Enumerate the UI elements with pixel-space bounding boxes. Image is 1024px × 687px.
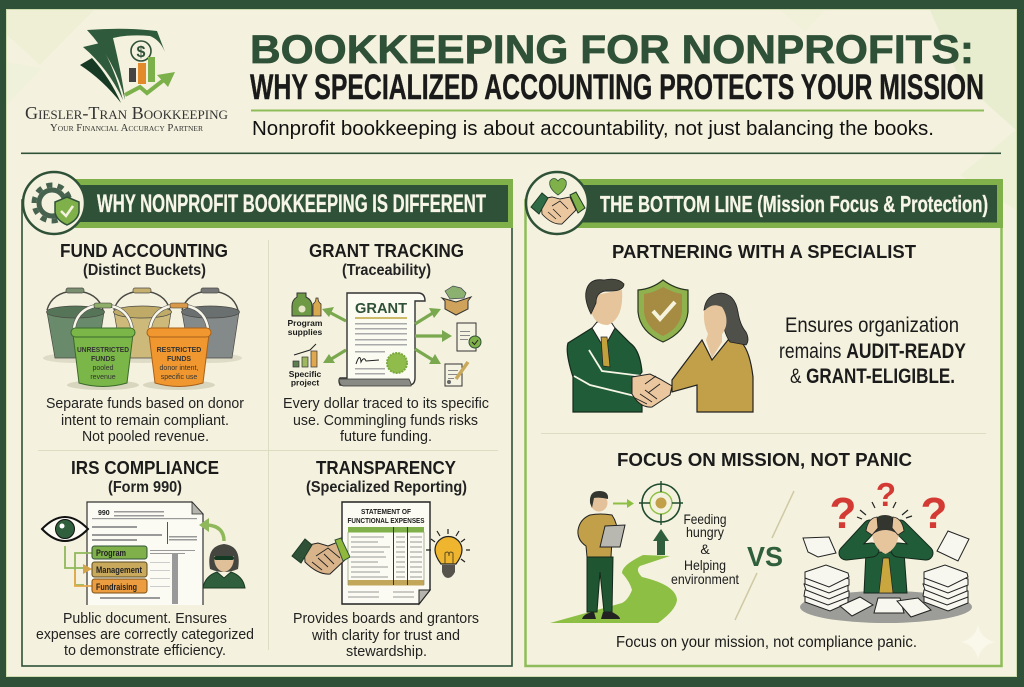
body text: Separate funds based on donor xyxy=(46,395,244,412)
arrow: person to target xyxy=(613,499,634,508)
tagline: Your Financial Accuracy Partner xyxy=(50,123,203,134)
connectors from eye to categories xyxy=(65,546,92,586)
mission label xyxy=(671,511,739,587)
icon: restricted funds bucket: donor intent, xyxy=(160,365,199,372)
icon: target xyxy=(639,481,683,525)
icon: grant document: GRANT xyxy=(355,300,407,317)
category labels: Program xyxy=(96,548,126,558)
category labels: Management xyxy=(96,565,142,575)
body text xyxy=(36,610,254,659)
panel: why nonprofit bookkeeping is different xyxy=(22,172,513,666)
body text xyxy=(46,395,244,445)
illustration: person with tablet xyxy=(578,491,625,619)
header text: WHY NONPROFIT BOOKKEEPING IS DIFFERENT xyxy=(97,190,486,218)
icon: unrestricted funds bucket xyxy=(67,303,139,390)
section: grant tracking xyxy=(283,241,489,445)
icon: ledger wings, coin and growth chart: $ xyxy=(137,44,146,61)
illustration: panicked person at desk xyxy=(800,515,972,623)
subheading: (Distinct Buckets) xyxy=(83,262,206,279)
icon: program supplies xyxy=(288,293,323,337)
icon: specific project: project xyxy=(291,378,319,388)
body text: Not pooled revenue. xyxy=(82,428,209,445)
body text: Provides boards and grantors xyxy=(293,610,479,627)
panel header band xyxy=(575,179,1003,228)
icon: question marks: ? xyxy=(921,489,947,538)
arrow: path to target xyxy=(653,529,669,555)
mission label: environment xyxy=(671,571,739,587)
body text: Every dollar traced to its specific xyxy=(283,395,489,412)
body text: use. Commingling funds risks xyxy=(293,412,478,429)
panel: the bottom line xyxy=(526,172,1003,666)
logo: Giesler-Tran Bookkeeping xyxy=(25,29,228,134)
callout: audit-ready and grant-eligible: remains AUDIT-READY xyxy=(779,340,966,363)
icon: restricted funds bucket: FUNDS xyxy=(167,356,191,363)
icon: form 990 document xyxy=(87,502,203,605)
icon: question marks: ? xyxy=(876,476,896,513)
icon: statement of functional expenses xyxy=(342,502,430,604)
icon: specific project xyxy=(289,344,322,388)
icon: ledger wings, coin and growth chart xyxy=(80,29,175,103)
icon: unrestricted funds bucket: FUNDS xyxy=(91,356,115,363)
mission label: & xyxy=(700,541,710,557)
illustration: man in green suit xyxy=(567,279,642,412)
icon: handshake xyxy=(292,538,350,574)
icon: form 990 document: 990 xyxy=(98,510,110,517)
icon: restricted funds bucket xyxy=(143,303,215,390)
icon: unrestricted funds bucket: revenue xyxy=(90,374,116,381)
callout: audit-ready and grant-eligible: Ensures organization xyxy=(785,314,959,337)
category labels xyxy=(92,546,147,593)
icon: question marks: ? xyxy=(830,489,856,538)
heading: GRANT TRACKING xyxy=(309,241,464,261)
VS label: VS xyxy=(747,541,783,572)
illustration: winding green path xyxy=(550,555,677,623)
illustration: woman in gold top xyxy=(672,293,753,412)
section: partnering with a specialist xyxy=(567,242,966,412)
icon: eye xyxy=(42,517,88,541)
icon: unrestricted funds bucket: UNRESTRICTED xyxy=(77,347,129,354)
icon: specific project: Specific xyxy=(289,369,322,379)
icon: program supplies: Program xyxy=(288,318,323,328)
icon: document with pen xyxy=(445,362,468,386)
icon: handshake with heart xyxy=(526,172,588,234)
body text xyxy=(283,395,489,445)
mission label: hungry xyxy=(686,524,724,540)
section: focus on mission, not panic xyxy=(550,450,972,651)
icon: restricted funds bucket: RESTRICTED xyxy=(157,347,201,354)
callout: audit-ready and grant-eligible: & GRANT-ELIGIBLE. xyxy=(790,365,955,388)
body text: intent to remain compliant. xyxy=(61,412,229,429)
body text: future funding. xyxy=(340,428,432,445)
subheading: (Specialized Reporting) xyxy=(306,479,467,496)
company name: Giesler-Tran Bookkeeping xyxy=(25,103,228,123)
heading: TRANSPARENCY xyxy=(316,458,456,478)
callout: audit-ready and grant-eligible xyxy=(779,314,966,388)
heading: IRS COMPLIANCE xyxy=(71,458,219,478)
icon: paper stacks and loose papers xyxy=(803,531,969,617)
body text xyxy=(293,610,479,660)
divider: versus slash xyxy=(735,491,794,620)
mission label: Feeding xyxy=(684,511,726,527)
body text: stewardship. xyxy=(346,643,427,660)
section: transparency xyxy=(292,458,479,660)
subheading: (Traceability) xyxy=(342,262,431,279)
title line 1: BOOKKEEPING FOR NONPROFITS: xyxy=(250,28,974,72)
category labels: Fundraising xyxy=(96,582,137,592)
mission label: Helping xyxy=(684,557,726,573)
icon: program supplies: supplies xyxy=(288,327,323,337)
icon: protection shield xyxy=(638,280,688,342)
panel header band xyxy=(75,179,513,228)
heading: PARTNERING WITH A SPECIALIST xyxy=(612,242,916,262)
body text: Public document. Ensures xyxy=(63,610,227,627)
icon: restricted funds bucket: specific use xyxy=(161,374,197,381)
section: IRS compliance xyxy=(36,458,254,659)
icon: question marks xyxy=(830,476,947,538)
icon: unrestricted funds bucket: pooled xyxy=(92,365,114,372)
subtitle: Nonprofit bookkeeping is about accountability, not just balancing the books. xyxy=(252,118,934,140)
section: fund accounting xyxy=(43,241,244,445)
icon: sparkle watermark xyxy=(961,625,995,659)
icon: auditor person xyxy=(203,544,245,588)
caption: Focus on your mission, not compliance panic. xyxy=(616,634,917,651)
arrows: grant to uses xyxy=(322,307,452,364)
icon: back buckets xyxy=(43,288,242,363)
illustration: central handshake xyxy=(632,374,672,407)
icon: curved arrow xyxy=(199,518,224,541)
body text: to demonstrate efficiency. xyxy=(64,642,226,659)
heading: FOCUS ON MISSION, NOT PANIC xyxy=(617,450,912,470)
subheading: (Form 990) xyxy=(108,479,182,496)
icon: gear and shield xyxy=(23,172,85,234)
icon: grant document xyxy=(339,293,425,386)
title xyxy=(250,28,984,107)
icon: document with check xyxy=(457,323,481,351)
icon: light bulb xyxy=(426,529,470,578)
icon: statement of functional expenses: STATEMENT OF xyxy=(361,507,411,516)
body text: expenses are correctly categorized xyxy=(36,626,254,643)
icon: statement of functional expenses: FUNCTIONAL EXPENSES xyxy=(348,516,424,525)
heading: FUND ACCOUNTING xyxy=(60,241,228,261)
body text: with clarity for trust and xyxy=(311,627,460,644)
icon: box of cash xyxy=(442,286,471,315)
